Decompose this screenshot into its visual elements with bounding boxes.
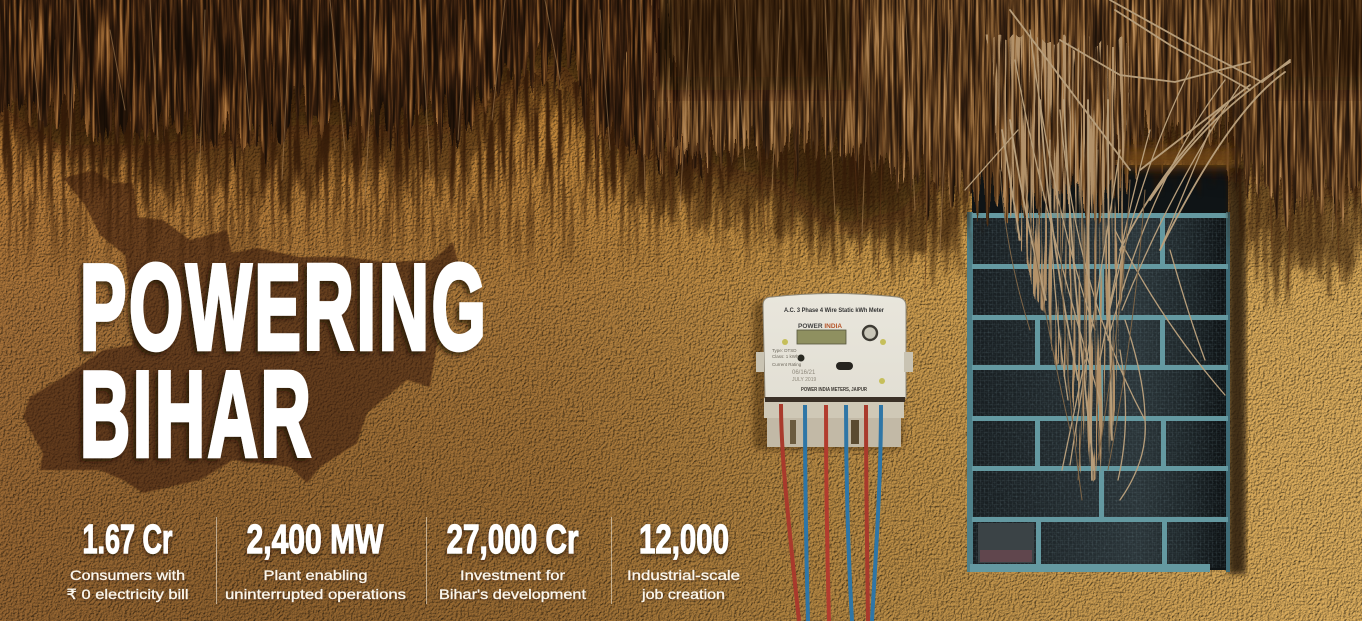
title [80,240,486,483]
stat: plant [225,516,406,602]
tan straw mass over window [985,40,1130,480]
thin dark strands trailing onto wall [0,70,1362,280]
thatch shadow on wall [0,0,1362,280]
dark patches in upper thatch [660,0,1362,90]
stat value: 27,000 Cr [446,516,579,562]
map of Bihar silhouette [23,170,458,493]
electricity meter [753,294,913,450]
window panes [972,218,1228,568]
meter small print: 06/16/21 [792,370,816,376]
meter indicators [782,339,886,384]
stat caption: uninterrupted operations [225,586,406,602]
title: POWERING [80,240,486,376]
soft dark shadow under thatch [0,0,1362,225]
meter small print: JULY 2019 [792,377,816,383]
stat caption: Consumers with [70,567,185,583]
stat caption: ₹ 0 electricity bill [66,586,188,602]
stat value: 12,000 [639,516,729,562]
stat caption [439,567,586,602]
meter display [797,330,846,344]
window dark opening [972,165,1228,570]
meter small print: Current Rating [772,362,802,367]
stat caption: Industrial-scale [627,567,740,583]
stat: consumers [66,516,188,602]
window [967,165,1246,574]
pale straw falling over window [965,0,1290,500]
thatch roof, right sunlit part [660,0,1362,210]
meter small print [772,348,816,383]
title: BIHAR [80,347,311,483]
stat caption [66,567,188,602]
coloured wires [781,404,881,621]
warm wall lip above window [1125,148,1233,168]
meter small print: Type: DTSD [772,348,797,353]
stat value: 2,400 MW [246,516,384,562]
meter heading: A.C. 3 Phase 4 Wire Static kWh Meter [784,307,885,314]
hanging straw strands [15,0,1340,290]
meter knob [863,326,877,340]
stat caption: Bihar's development [439,586,586,602]
meter maker: POWER INDIA METERS, JAIPUR [801,387,867,393]
meter face [763,294,906,398]
meter brand: POWER INDIA [798,323,842,330]
stat: jobs [627,516,740,602]
meter small print: Class: 1 kWh [772,354,799,359]
stat caption [225,567,406,602]
meter lower clear housing [764,398,904,447]
window grille [967,212,1230,572]
window recess shadow [1228,165,1246,574]
stat caption: Investment for [460,567,565,583]
stat value: 1.67 Cr [82,516,173,562]
stat caption: Plant enabling [264,567,368,583]
stat caption [627,567,740,602]
stat caption: job creation [641,586,725,602]
meter shadow [753,300,903,450]
stat: investment [439,516,586,602]
meter side lugs [756,352,913,372]
thatch roof [0,0,700,170]
